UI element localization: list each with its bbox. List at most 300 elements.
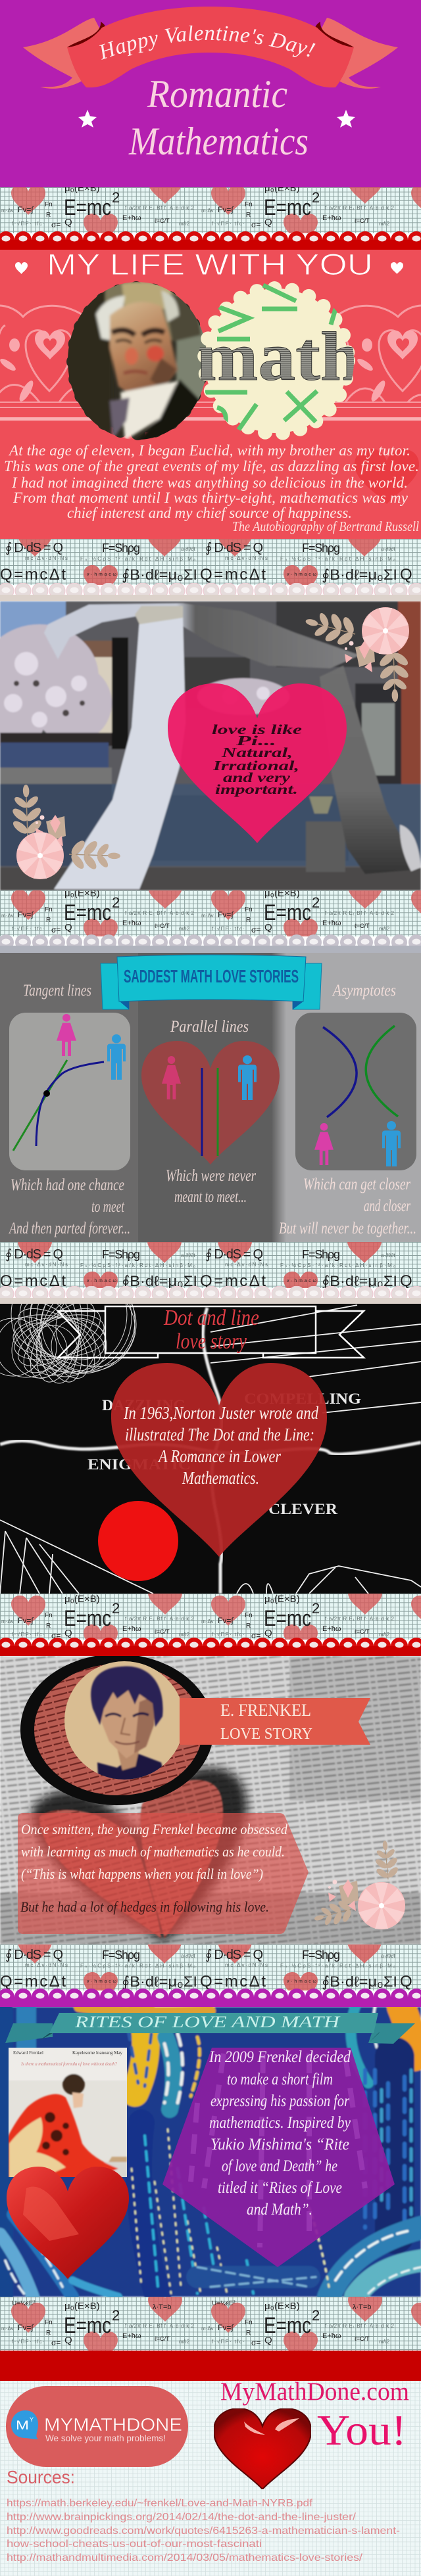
panel: footer <box>0 2378 421 2576</box>
translucent text panel: But he had a lot of hedges in following his love. <box>20 1898 269 1915</box>
math strip 7: μ₀(E×B) <box>64 2301 100 2312</box>
math word: math <box>196 318 362 395</box>
folk heart pattern <box>0 306 421 402</box>
math strip 4: Fₙ·½CρS·f²·a/k·Rdt·ΔH·sinβ·Mₐ <box>280 1262 396 1268</box>
math strip 4: Q <box>400 1272 412 1290</box>
heart: dot and line story <box>111 1363 327 1557</box>
panel: rites of love and math <box>0 2007 421 2300</box>
math strip 7: E=mc <box>264 2313 311 2338</box>
math strip 4: Fₙ·½CρS·f²·a/k·Rdt·ΔH·sinβ·Mₐ <box>80 1262 196 1268</box>
math strip 3: σ= <box>251 925 260 934</box>
math strip 4: a·∂f/∂t <box>181 1253 195 1258</box>
ribbon heading: love story <box>176 1329 247 1354</box>
heart text: important. <box>215 781 298 797</box>
math strip 7: f·a/2π R E₁ Bf f· A·b·d·k 2 <box>325 2323 395 2329</box>
asymptote labels: Asymptotes <box>332 982 396 1000</box>
translucent text panel: with learning as much of mathematics as he could. <box>21 1843 285 1860</box>
math strip 3: Fn <box>245 906 253 913</box>
icon: logo bubble: Y <box>30 2416 34 2423</box>
lace border beige <box>0 583 421 601</box>
math strip 5: mℏ2 <box>379 1632 390 1638</box>
math strip 1: ℓ=C/T <box>155 218 170 224</box>
quote: This was one of the great events of my life, as dazzling as first love. <box>4 458 419 474</box>
math strip 2: ∮ D·dS = Q <box>5 541 63 555</box>
math strip 4 <box>0 1242 421 1290</box>
translucent text panel: (“This is what happens when you fall in love”) <box>21 1866 263 1882</box>
pentagon text: expressing his passion for <box>210 2092 349 2110</box>
math strip 5: ℓ=C/T <box>155 1628 170 1635</box>
math strip 3: Q <box>64 922 72 933</box>
math strip 3: E=mc <box>64 900 111 925</box>
heart: love is like pi <box>168 683 347 843</box>
math strip 1: f·√ΠF· tfc· <box>212 221 245 227</box>
icon: star right <box>337 110 355 127</box>
math strip 6: mc·Δv·dN·Ns <box>25 1962 68 1968</box>
tangent labels: to meet <box>91 1198 125 1216</box>
heart text <box>123 1403 318 1488</box>
quote: chief interest and my chief source of happiness. <box>67 505 352 521</box>
quote <box>4 442 419 521</box>
heart text: love is like <box>212 722 302 737</box>
tangent labels: Tangent lines <box>23 982 91 1000</box>
flowers top right <box>301 605 411 702</box>
math strip 1 <box>0 183 421 233</box>
math strip 6: a·∂f/∂t <box>181 1953 195 1959</box>
math strip 1: 2 <box>312 189 320 206</box>
parallel labels: Parallel lines <box>170 1018 249 1036</box>
math strip 3: 2 <box>112 894 120 911</box>
sources heading: Sources: <box>7 2467 75 2487</box>
math strip 2: mc·Δv·dN·Ns <box>25 555 68 561</box>
math strip 2: v·hmacω <box>287 572 317 577</box>
math strip 2: Fₙ·½CρS·f²·a/k·Rdt·ΔH·sinβ·Mₐ <box>280 556 396 562</box>
math strip 7: f·√ΠF· tfc· <box>12 2339 45 2345</box>
math strip 7 <box>0 2297 421 2351</box>
math strip 2 <box>0 539 421 585</box>
word list: DAZZLING <box>102 1397 186 1414</box>
math strip 7: f·a/2π R E₁ Bf f· A·b·d·k 2 <box>125 2323 195 2329</box>
math strip 5: E+ħω <box>122 1625 141 1633</box>
math strip 7: U=½εE² <box>12 2300 36 2307</box>
math strip 5: Q <box>64 1628 72 1639</box>
word list: CLEVER <box>268 1501 337 1517</box>
pentagon text: and Math”. <box>247 2201 312 2219</box>
icon: logo bubble <box>11 2410 38 2439</box>
math strip 3: Fn <box>45 906 53 913</box>
quote: I had not imagined there was anything so delicious in the world. <box>11 474 408 491</box>
pi top bar <box>44 603 360 668</box>
heading <box>15 248 403 281</box>
math strip 3: E=mc <box>264 900 311 925</box>
math strip 5: R <box>46 1622 51 1630</box>
ribbon heading: Dot and line <box>163 1306 259 1330</box>
portrait: Frenkel <box>64 1661 184 1787</box>
math strip 4: ∮ D·dS = Q <box>205 1247 263 1262</box>
title <box>128 72 309 163</box>
math strip 2: Q <box>400 566 412 584</box>
math strip 7: Fn <box>45 2319 53 2326</box>
math strip 3: 2 <box>312 894 320 911</box>
shadow of heart <box>32 1768 247 1942</box>
math strip 7: λ·T=b <box>353 2303 371 2311</box>
ribbon heading <box>163 1306 259 1354</box>
math strip 1: f·a/2π R E₁ Bf f· A·b·d·k 2 <box>325 205 395 211</box>
dictionary background <box>0 1656 421 1944</box>
math strip 6: a·∂f/∂t <box>381 1953 395 1959</box>
red dot <box>98 1501 178 1581</box>
math strip 3: ℓ=C/T <box>355 923 370 929</box>
math strip 6: Fₙ·½CρS·f²·a/k·Rdt·ΔH·sinβ·Mₐ <box>280 1963 396 1969</box>
math strip 6: mc·Δv·dN·Ns <box>225 1962 268 1968</box>
math strip 1: E=mc <box>64 195 111 220</box>
poster <box>7 2048 127 2182</box>
translucent text panel: Once smitten, the young Frenkel became obsessed <box>21 1821 288 1837</box>
math strip 1: f·a/2π R E₁ Bf f· A·b·d·k 2 <box>125 205 195 211</box>
logo pill: We solve your math problems! <box>45 2433 166 2443</box>
lace border purple <box>0 1989 421 2007</box>
math strip 2: a·∂f/∂t <box>381 546 395 552</box>
math strip 7: E+ħω <box>322 2332 341 2340</box>
math strip 7: E+ħω <box>122 2332 141 2340</box>
math strip 7: μ₀(E×B) <box>264 2301 300 2312</box>
math strip 5: E=mc <box>264 1606 311 1631</box>
math strip 4: v·hmacω <box>287 1279 317 1283</box>
math strip 1: E+ħω <box>122 214 141 222</box>
flowers bottom left <box>10 784 121 879</box>
math strip 6: v·hmacω <box>287 1979 317 1984</box>
ribbon label: E. FRENKEL <box>220 1701 311 1720</box>
math strip 5: E+ħω <box>322 1625 341 1633</box>
math strip 2: mc·Δv·dN·Ns <box>225 555 268 561</box>
poster: Is there a mathematical formula of love without death? <box>20 2061 117 2067</box>
scalloped circle: math <box>196 285 362 437</box>
lens <box>20 1654 214 1805</box>
title: Romantic <box>147 72 287 116</box>
math strip 5 <box>0 1594 421 1640</box>
math strip 2: ∮B·dℓ=μ₀ΣI <box>322 566 397 583</box>
math strip 6: Q <box>400 1973 412 1990</box>
ribbon label: LOVE STORY <box>220 1726 312 1743</box>
math strip 6: ∮ D·dS = Q <box>5 1948 63 1962</box>
math strip 1: μ₀(E×B) <box>264 183 300 194</box>
math strip 1: m·Δv <box>201 208 214 214</box>
translucent heart <box>355 449 419 504</box>
heart text: Natural, <box>221 745 293 760</box>
heart text: Irrational, <box>212 758 299 773</box>
math strip 4: Q=mcΔt <box>200 1272 266 1290</box>
pi right leg <box>320 666 419 874</box>
math strip 7: E=mc <box>64 2313 111 2338</box>
math strip 3: f·√ΠF· tfc· <box>12 926 45 932</box>
math strip 3: m·Δv <box>1 913 14 919</box>
math strip 1: 2 <box>112 189 120 206</box>
straight lines <box>0 1305 421 1594</box>
ribbon text: Happy Valentine's Day! <box>99 25 316 60</box>
quote: At the age of eleven, I began Euclid, with my brother as my tutor. <box>8 442 410 459</box>
ribbon outline <box>58 1306 364 1358</box>
math strip 6: ∮B·dℓ=μ₀ΣI <box>122 1973 197 1990</box>
portrait: Bertrand Russell <box>66 281 212 446</box>
banner: SADDEST MATH LOVE STORIES <box>124 966 299 986</box>
panel: pi sculpture photo <box>0 601 421 890</box>
math strip 1: mℏ2 <box>379 221 390 227</box>
math strip 1: σ= <box>251 220 260 229</box>
math strip 5: m·Δv <box>201 1619 214 1624</box>
math strip 7: 2 <box>112 2307 120 2324</box>
you: You! <box>317 2406 407 2454</box>
math strip 3: Fv=∫ <box>218 910 234 919</box>
math strip 1: m·Δv <box>1 208 14 214</box>
math strip 7: mℏ2 <box>179 2339 190 2345</box>
math strip 4: ∮ D·dS = Q <box>5 1247 63 1262</box>
math strip 4: F=Shρg <box>102 1248 140 1261</box>
math strip 5: E=mc <box>64 1606 111 1631</box>
math strip 1: R <box>46 212 51 219</box>
lace border red <box>0 1638 421 1656</box>
tangent labels: And then parted forever... <box>9 1220 130 1237</box>
asymptote labels <box>279 982 416 1237</box>
math strip 4: ∮B·dℓ=μ₀ΣI <box>122 1273 197 1289</box>
math strip 7: Fv=∫ <box>18 2323 34 2332</box>
big heart <box>214 2408 311 2489</box>
source links: http://www.brainpickings.org/2014/02/14/the-dot-and-the-line-juster/ <box>7 2512 357 2523</box>
math strip 6: Q=mcΔt <box>0 1973 66 1990</box>
quote: From that moment until I was thirty-eight, mathematics was my <box>12 490 409 506</box>
panel: my life with you <box>0 248 421 539</box>
math strip 3: f·a/2π R E₁ Bf f· A·b·d·k 2 <box>325 910 395 916</box>
math strip 2: ∮B·dℓ=μ₀ΣI <box>122 566 197 583</box>
math strip 5: 2 <box>112 1600 120 1617</box>
math strip 5: μ₀(E×B) <box>264 1594 300 1605</box>
heart text: Mathematics. <box>182 1468 259 1488</box>
math strip 3: f·√ΠF· tfc· <box>212 926 245 932</box>
lace border red <box>0 231 421 250</box>
math strip 6 <box>0 1944 421 1990</box>
math strip 3: μ₀(E×B) <box>264 888 300 899</box>
math strip 4: Q=mcΔt <box>0 1272 66 1290</box>
word list: COMPELLING <box>244 1391 361 1407</box>
math strip 3: m·Δv <box>201 913 214 919</box>
math strip 7: Fv=∫ <box>218 2323 234 2332</box>
heart text: illustrated The Dot and the Line: <box>125 1425 314 1444</box>
math strip 3: Q <box>264 922 272 933</box>
math strip 1: mℏ2 <box>179 221 190 227</box>
panel: saddest math love stories <box>0 953 421 1242</box>
cherry blossom tree <box>0 624 289 749</box>
chart: parallel lines <box>141 1041 280 1164</box>
math strip 3: R <box>46 917 51 924</box>
ribbon: RITES OF LOVE AND MATH <box>74 2013 341 2031</box>
math strip 6: ∮B·dℓ=μ₀ΣI <box>322 1973 397 1990</box>
math strip 6: Fₙ·½CρS·f²·a/k·Rdt·ΔH·sinβ·Mₐ <box>80 1963 196 1969</box>
heart text <box>212 722 302 797</box>
math strip 4: F=Shρg <box>302 1248 340 1261</box>
pink hearts <box>0 331 418 403</box>
math strip 1: Fn <box>245 201 253 208</box>
painted background <box>0 2007 421 2300</box>
math strip 1: Fv=∫ <box>218 205 234 214</box>
math strip 7: m·Δv <box>1 2326 14 2332</box>
red band <box>0 2351 421 2381</box>
math strip 1: Q <box>264 217 272 228</box>
math strip 4: mc·Δv·dN·Ns <box>25 1262 68 1268</box>
chart: tangent lines <box>9 1013 130 1170</box>
pentagon text: Yukio Mishima's “Rite <box>210 2136 349 2153</box>
translucent text panel <box>18 1813 309 1934</box>
pentagon text: In 2009 Frenkel decided <box>209 2048 351 2066</box>
parallel labels: Which were never <box>166 1167 256 1185</box>
math strip 1: σ= <box>51 220 61 229</box>
math strip 5: Fn <box>245 1612 253 1619</box>
math strip 7: R <box>246 2330 251 2337</box>
math strip 4: mc·Δv·dN·Ns <box>225 1262 268 1268</box>
pi white leg <box>54 616 186 889</box>
math strip 7: U=½εE² <box>212 2300 236 2307</box>
math strip 2: F=Shρg <box>302 541 340 555</box>
heading: MY LIFE WITH YOU <box>47 248 373 281</box>
flower decoration <box>311 1840 405 1931</box>
lace border grey <box>0 934 421 953</box>
pentagon text: mathematics. Inspired by <box>209 2114 351 2132</box>
book heart <box>39 1780 223 1939</box>
math strip 3: E+ħω <box>122 919 141 927</box>
math strip 1: E+ħω <box>322 214 341 222</box>
math strip 7: σ= <box>251 2338 260 2347</box>
source links: how-school-cheats-us-out-of-our-most-fascinati <box>7 2539 262 2550</box>
math strip 7: f·√ΠF· tfc· <box>212 2339 245 2345</box>
white wavy lines <box>0 1308 421 1594</box>
math strip 5: Fn <box>45 1612 53 1619</box>
source links: http://mathandmultimedia.com/2014/03/05/mathematics-love-stories/ <box>7 2552 363 2564</box>
math strip 5: m·Δv <box>1 1619 14 1624</box>
math strip 4: a·∂f/∂t <box>381 1253 395 1258</box>
math strip 6: v·hmacω <box>87 1979 117 1984</box>
panel: dot and line love story <box>0 1304 421 1594</box>
math strip 4: v·hmacω <box>87 1279 117 1283</box>
tangent labels: Which had one chance <box>11 1176 124 1194</box>
ribbon banner <box>23 7 398 89</box>
header panel <box>0 0 421 187</box>
math strip 3: f·a/2π R E₁ Bf f· A·b·d·k 2 <box>125 910 195 916</box>
math strip 3: mℏ2 <box>179 926 190 932</box>
math strip 2: Fₙ·½CρS·f²·a/k·Rdt·ΔH·sinβ·Mₐ <box>80 556 196 562</box>
source links: https://math.berkeley.edu/~frenkel/Love-and-Math-NYRB.pdf <box>7 2498 313 2509</box>
math strip 7: Q <box>264 2335 272 2346</box>
math strip 6: F=Shρg <box>302 1948 340 1962</box>
math strip 6: F=Shρg <box>102 1948 140 1962</box>
math strip 7: ℓ=C/T <box>155 2335 170 2342</box>
math strip 1: Q <box>64 217 72 228</box>
math strip 3: E+ħω <box>322 919 341 927</box>
math strip 3: R <box>246 917 251 924</box>
3D heart <box>7 2167 129 2279</box>
math strip 7: σ= <box>51 2338 61 2347</box>
ribbon label <box>180 1698 370 1745</box>
pentagon text: titled it “Rites of Love <box>218 2179 342 2197</box>
math strip 1: Fn <box>45 201 53 208</box>
math strip 7: λ·T=b <box>153 2303 171 2311</box>
math strip 5: Fv=∫ <box>218 1616 234 1625</box>
icon: logo bubble: M <box>16 2419 29 2433</box>
math strip 5: Fv=∫ <box>18 1616 34 1625</box>
math strip 5: mℏ2 <box>179 1632 190 1638</box>
word list <box>87 1391 361 1517</box>
math strip 3: μ₀(E×B) <box>64 888 100 899</box>
logo pill <box>6 2386 188 2467</box>
math strip 2: F=Shρg <box>102 541 140 555</box>
math strip 7: 2 <box>312 2307 320 2324</box>
math strip 1: R <box>246 212 251 219</box>
math strip 5: ℓ=C/T <box>355 1628 370 1635</box>
math strip 3: ℓ=C/T <box>155 923 170 929</box>
math strip 2: ∮ D·dS = Q <box>205 541 263 555</box>
heart text: In 1963,Norton Juster wrote and <box>123 1403 318 1423</box>
poster: Edward Frenkel <box>13 2050 43 2056</box>
math strip 3: σ= <box>51 925 61 934</box>
math strip 5: f·√ΠF· tfc· <box>212 1632 245 1638</box>
math strip 2: a·∂f/∂t <box>181 546 195 552</box>
math strip 5: Q <box>264 1628 272 1639</box>
math strip 7: R <box>46 2330 51 2337</box>
source links <box>7 2498 400 2564</box>
poster: Kayelesome Ioanoang May <box>72 2050 122 2056</box>
math strip 1: ℓ=C/T <box>355 218 370 224</box>
math strip 7: Q <box>64 2335 72 2346</box>
parallel labels <box>166 1018 256 1206</box>
math strip 5: 2 <box>312 1600 320 1617</box>
lace border beige <box>0 1286 421 1304</box>
parallel labels: meant to meet... <box>174 1188 247 1206</box>
math strip 3: mℏ2 <box>379 926 390 932</box>
tangent labels <box>9 982 130 1237</box>
pentagon text: of love and Death” he <box>222 2157 337 2175</box>
math strip 5: f·√ΠF· tfc· <box>12 1632 45 1638</box>
math strip 5: σ= <box>51 1631 61 1640</box>
math strip 3: Fv=∫ <box>18 910 34 919</box>
math strip 5: σ= <box>251 1631 260 1640</box>
heart text: and very <box>223 770 291 785</box>
banner <box>101 955 322 1009</box>
spirograph <box>0 1304 137 1384</box>
math strip 2: Q=mcΔt <box>0 566 66 584</box>
math strip 1: μ₀(E×B) <box>64 183 100 194</box>
math strip 3 <box>0 888 421 936</box>
purple pentagon <box>162 2048 395 2267</box>
math strip 7: m·Δv <box>201 2326 214 2332</box>
ribbon <box>5 2013 415 2044</box>
heart text: Pi... <box>235 733 276 748</box>
math strip 6: Q=mcΔt <box>200 1973 266 1990</box>
pentagon text: to make a short film <box>227 2071 333 2088</box>
math strip 2: v·hmacω <box>87 572 117 577</box>
math strip 1: f·√ΠF· tfc· <box>12 221 45 227</box>
math strip 5: f·a/2π R E₁ Bf f· A·b·d·k 2 <box>125 1616 195 1622</box>
math strip 6: ∮ D·dS = Q <box>205 1948 263 1962</box>
panel: E. Frenkel love story <box>0 1654 421 1944</box>
math strip 4: ∮B·dℓ=μ₀ΣI <box>322 1273 397 1289</box>
math strip 5: f·a/2π R E₁ Bf f· A·b·d·k 2 <box>325 1616 395 1622</box>
math strip 5: μ₀(E×B) <box>64 1594 100 1605</box>
heart text: A Romance in Lower <box>157 1446 281 1466</box>
math strip 5: R <box>246 1622 251 1630</box>
source links: http://www.goodreads.com/work/quotes/6415263-a-mathematician-s-lament- <box>7 2525 400 2537</box>
chart: asymptotes <box>295 1013 416 1170</box>
math strip 7: ℓ=C/T <box>355 2335 370 2342</box>
icon: star left <box>78 110 97 127</box>
math strip 1: E=mc <box>264 195 311 220</box>
math strip 1: Fv=∫ <box>18 205 34 214</box>
pentagon text <box>209 2048 351 2219</box>
